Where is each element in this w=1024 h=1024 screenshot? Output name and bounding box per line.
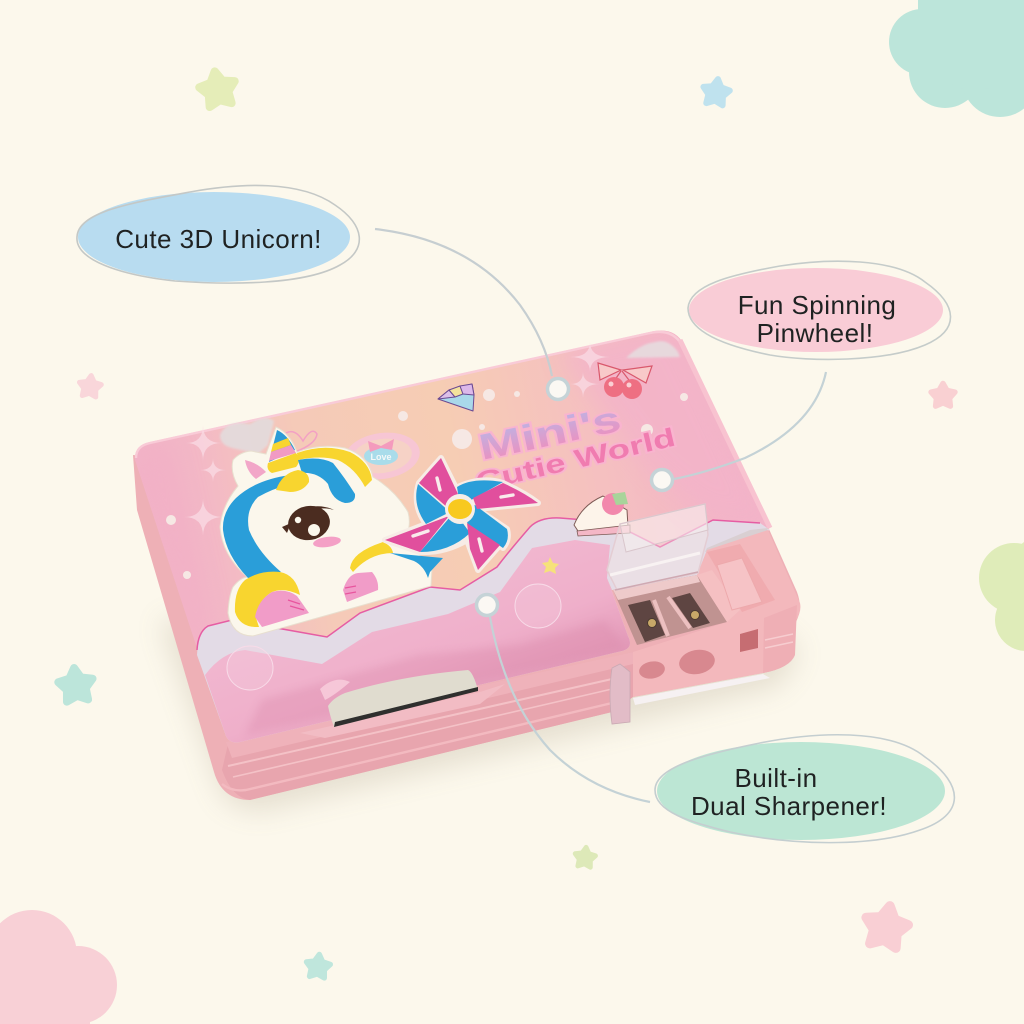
- marker: pinwheel: [652, 470, 672, 490]
- callout: cute 3D unicorn: Cute 3D Unicorn!: [115, 224, 322, 254]
- cloud: right green: [979, 535, 1024, 651]
- hole large: [677, 647, 717, 677]
- screw right: [690, 610, 700, 620]
- highlight on lid front: [320, 680, 350, 700]
- connector: sharpener: [490, 617, 650, 802]
- white underside: [633, 674, 770, 705]
- hole small: [638, 659, 666, 681]
- cavity: [613, 575, 727, 645]
- star: teal bottom: [305, 953, 331, 978]
- swirl: [276, 470, 309, 492]
- blade right: [672, 593, 710, 628]
- star: blue top: [701, 77, 731, 106]
- right housing: [633, 530, 800, 697]
- blade left: [628, 600, 665, 642]
- collar: [350, 542, 393, 572]
- lid right silver strip: [705, 528, 768, 552]
- clear tab: [610, 664, 630, 724]
- lower left yellow: [235, 572, 300, 627]
- shadow: [160, 620, 800, 812]
- unicorn charm: [220, 427, 443, 636]
- lid pink washes: [135, 331, 770, 736]
- cloud print top right: [626, 341, 680, 358]
- charm base: [220, 427, 432, 636]
- callout: built-in dual sharpener: [655, 735, 954, 843]
- marker: sharpener: [476, 594, 498, 616]
- magenta blades: [419, 458, 458, 508]
- clear flip cover: [607, 504, 708, 590]
- cloud: bottom left pink: [0, 910, 117, 1024]
- callout: fun spinning pinwheel: Pinwheel!: [757, 318, 873, 348]
- star: pink right: [931, 383, 955, 406]
- hub: [445, 494, 475, 524]
- star: green bottom: [574, 846, 596, 868]
- bow and cherries print: [598, 363, 652, 399]
- hoof right: [343, 572, 378, 602]
- star: teal left: [57, 666, 95, 702]
- callout: built-in dual sharpener: Built-in: [734, 763, 818, 793]
- right pillar: [763, 605, 797, 673]
- callout: cute 3D unicorn: [77, 185, 359, 283]
- lid title print: [473, 398, 678, 497]
- marker: unicorn: [548, 378, 568, 400]
- callout: fun spinning pinwheel: Fun Spinning: [738, 290, 896, 320]
- heart print: [284, 431, 317, 452]
- forelock: [298, 459, 355, 503]
- pencil box: [133, 331, 800, 812]
- cloud: top right teal: [889, 0, 1024, 117]
- metal clasp: [328, 670, 478, 727]
- screw left: [648, 618, 656, 628]
- lid title print: Cutie World: [473, 422, 678, 497]
- lid rim highlight: [136, 332, 682, 458]
- lid: [135, 331, 770, 742]
- lower cloud print: [197, 518, 770, 742]
- blue mane: [223, 475, 290, 578]
- hoof marks: [288, 586, 356, 610]
- dots print: [166, 389, 688, 579]
- blue sectors: [416, 484, 450, 524]
- blade slots: [413, 478, 513, 551]
- star: lime top left: [197, 68, 238, 108]
- callout: built-in dual sharpener: Dual Sharpener!: [691, 791, 887, 821]
- sparkles print: [184, 342, 610, 536]
- callout: fun spinning pinwheel: [688, 261, 951, 359]
- slider rail: [707, 544, 775, 612]
- blush: [312, 535, 342, 549]
- cavity floor ribs: [654, 597, 690, 636]
- star: pink bottom right: [862, 902, 911, 950]
- pinwheel: [385, 458, 538, 570]
- window: [740, 629, 758, 652]
- hoof left: [255, 591, 309, 627]
- base tray: [133, 455, 800, 800]
- cake print: [574, 492, 630, 536]
- small star print: [542, 557, 559, 574]
- bubble prints: [227, 584, 561, 690]
- front side with grooves: [222, 652, 633, 800]
- slider button: [717, 558, 762, 610]
- silhouette backing: [385, 458, 538, 570]
- blue body: [390, 553, 443, 578]
- diamond print: [438, 384, 474, 411]
- ear inner: [245, 460, 266, 479]
- connector: unicorn: [375, 229, 552, 376]
- yellow mane: [297, 448, 372, 487]
- star: pink left: [78, 374, 102, 397]
- lid title print: Mini's: [475, 398, 625, 468]
- sharpener compartment: [613, 530, 800, 705]
- eye: [282, 503, 334, 543]
- love badge print: Love: [370, 452, 392, 462]
- cloud print top left: [220, 418, 274, 454]
- connector: pinwheel: [674, 372, 826, 479]
- horn: [269, 430, 295, 462]
- lid bevel shading: [250, 624, 612, 732]
- inner wall: [697, 570, 740, 622]
- love badge print: [341, 428, 423, 484]
